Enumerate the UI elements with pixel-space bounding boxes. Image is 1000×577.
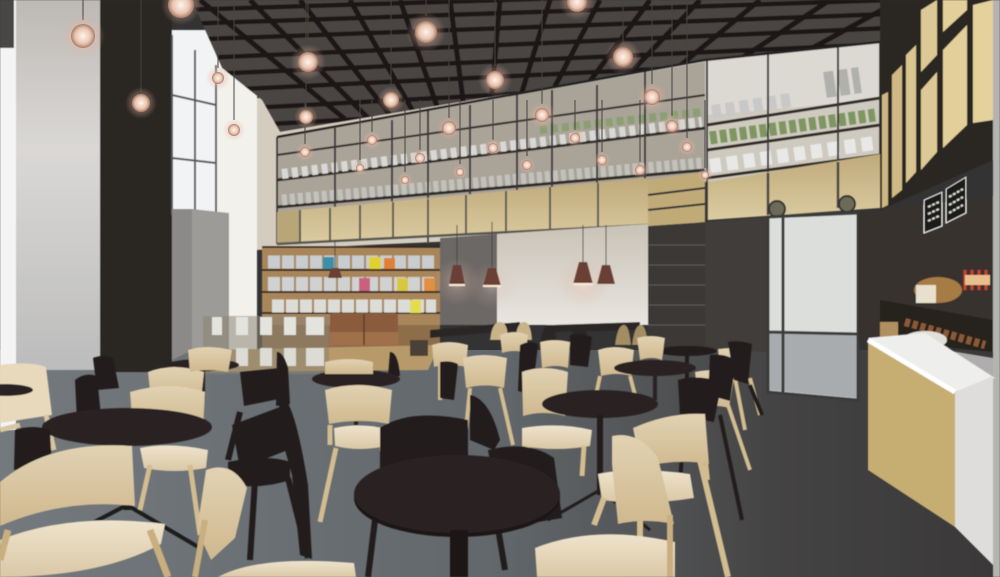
chair: black left mid	[14, 427, 52, 470]
low platform and glass rail	[203, 316, 440, 374]
chair: wood centre right	[522, 368, 592, 502]
chair: wood front right	[535, 435, 675, 577]
pendant bulbs	[61, 0, 713, 188]
chair: black left cluster	[75, 352, 312, 559]
beige wall above shelves	[257, 50, 700, 250]
coffee counter display	[880, 270, 993, 385]
back row of chairs and tables	[0, 332, 762, 577]
table: far left	[167, 359, 239, 400]
right chipboard panels	[882, 0, 993, 208]
round wall vents	[769, 196, 855, 217]
table: far-left edge	[0, 384, 33, 396]
chair: wood far left	[0, 363, 54, 450]
chair: wood back left	[148, 347, 373, 400]
ceiling	[193, 0, 880, 132]
chair: wood front left	[0, 445, 168, 577]
table: front centre	[354, 455, 560, 577]
table: centre back	[614, 360, 696, 400]
hanging signs	[924, 177, 966, 233]
table: far centre right	[657, 346, 717, 395]
chair: wood right mid	[594, 414, 728, 577]
floor	[0, 350, 1000, 577]
chair: wood front centre-left	[195, 467, 356, 577]
chairs: mid row black	[388, 334, 752, 422]
dark column	[100, 0, 172, 372]
tall window	[172, 30, 218, 220]
distant tables and bar chairs	[430, 322, 648, 345]
right edge pillar	[993, 0, 1000, 577]
table: centre	[542, 390, 658, 530]
magazine wall	[262, 247, 440, 350]
frame uprights	[277, 42, 880, 330]
bright wall strip	[217, 60, 257, 350]
chairs: mid row wood	[432, 332, 750, 408]
glass door	[768, 213, 858, 400]
chair: wood left back	[130, 386, 208, 535]
mezzanine shelving	[277, 42, 880, 330]
dark right wall	[858, 195, 1000, 350]
right dark soffit	[880, 0, 993, 210]
back wall sections	[440, 172, 768, 352]
chipboard band	[277, 154, 880, 244]
side table dark block	[410, 340, 428, 356]
left window frame top	[0, 0, 14, 48]
left wall	[16, 0, 100, 370]
pendant lamps lower	[328, 222, 615, 310]
left glazed strip	[0, 0, 16, 430]
coffee counter	[868, 333, 995, 565]
shelves	[277, 98, 880, 207]
chair: black behind front table	[368, 395, 562, 577]
leather sofa	[330, 313, 398, 345]
chair: wood centre-left	[320, 385, 392, 522]
table: back left	[312, 370, 400, 440]
grey partition	[172, 209, 192, 360]
stock	[282, 122, 702, 174]
table: left	[42, 408, 212, 548]
